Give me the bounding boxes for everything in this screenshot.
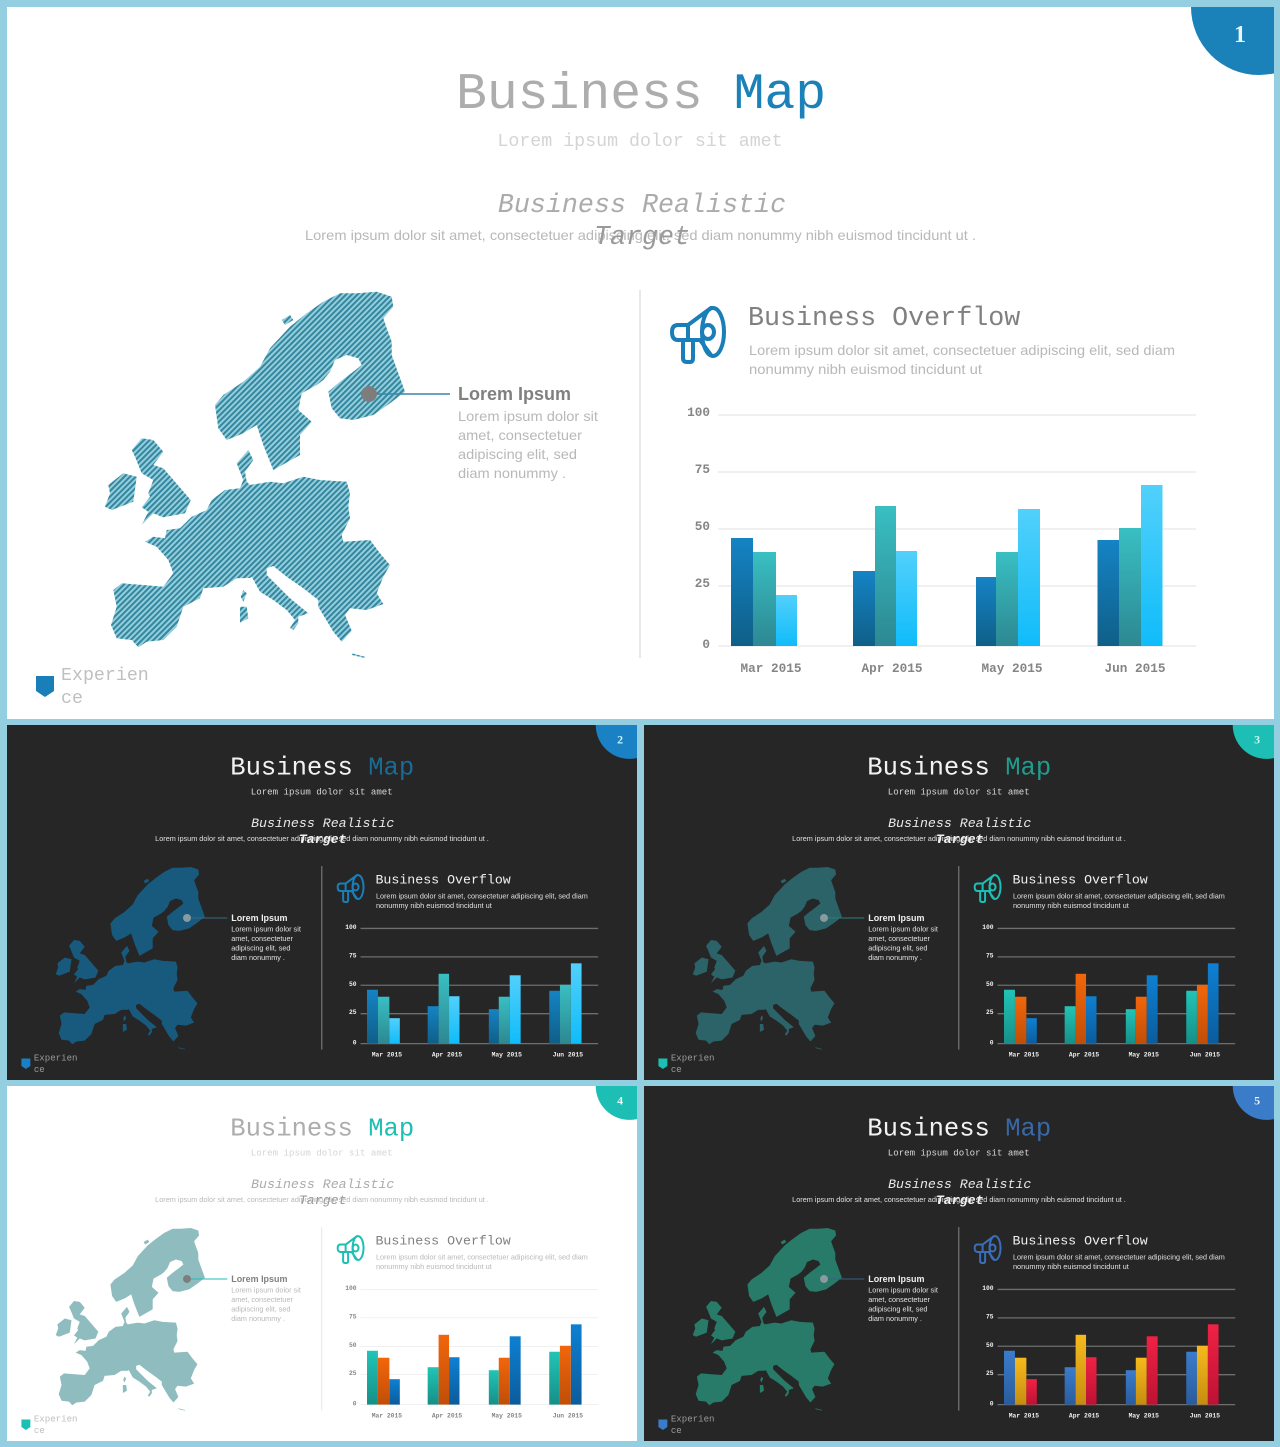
bar chart: 75	[695, 462, 710, 477]
section heading overflow word: Target	[936, 832, 984, 847]
callout text: Lorem ipsum dolor sit	[868, 926, 938, 933]
panel heading: Business Overflow	[1012, 1234, 1148, 1249]
icon: megaphone	[672, 308, 724, 362]
callout text: diam nonummy .	[231, 1316, 285, 1323]
section heading overflow word: Target	[299, 832, 347, 847]
bar chart: 0	[353, 1040, 357, 1047]
bar chart: May 2015	[1129, 1413, 1159, 1420]
footer logo: Experien	[34, 1053, 78, 1064]
section heading overflow word: Target	[299, 1193, 347, 1208]
callout text: diam nonummy .	[868, 955, 922, 962]
callout text: Lorem ipsum dolor sit	[231, 926, 301, 933]
bar chart: 50	[986, 1342, 994, 1349]
callout line	[369, 393, 450, 395]
intro text: Lorem ipsum dolor sit amet, consectetuer adipiscing elit, sed diam nonummy nibh euismod tincidunt ut .	[792, 1197, 1126, 1204]
intro text: Lorem ipsum dolor sit amet, consectetuer adipiscing elit, sed diam nonummy nibh euismod tincidunt ut .	[305, 227, 976, 243]
callout text: amet, consectetuer	[868, 1297, 931, 1304]
bar chart: 50	[349, 1342, 357, 1349]
bar chart: Apr 2015	[1069, 1413, 1099, 1420]
bar chart: May 2015	[492, 1052, 522, 1059]
footer logo: Experien	[671, 1053, 715, 1064]
section heading overflow word: Target	[594, 223, 690, 253]
bar chart: 50	[986, 981, 994, 988]
panel heading: Business Overflow	[1012, 873, 1148, 888]
footer logo: Experien	[34, 1414, 78, 1425]
bar chart	[687, 405, 1196, 676]
bar chart: 75	[349, 952, 357, 959]
bar chart: Mar 2015	[1009, 1413, 1039, 1420]
panel text: nonummy nibh euismod tincidunt ut	[376, 1264, 492, 1271]
bar chart: 25	[349, 1370, 357, 1377]
callout text: amet, consectetuer	[231, 936, 294, 943]
bar chart: 75	[349, 1313, 357, 1320]
panel heading: Business Overflow	[748, 304, 1020, 334]
footer logo: ce	[671, 1064, 682, 1075]
slide 2: dark blue	[7, 725, 637, 1080]
bar chart: 100	[687, 405, 710, 420]
bar chart: Jun 2015	[1190, 1413, 1220, 1420]
callout text: Lorem Ipsum	[868, 1274, 924, 1284]
panel text	[376, 1255, 588, 1271]
panel text: Lorem ipsum dolor sit amet, consectetuer adipiscing elit, sed diam	[376, 894, 588, 901]
bar chart	[345, 1285, 598, 1420]
callout text: Lorem ipsum dolor sit	[868, 1287, 938, 1294]
bar chart: Jun 2015	[1105, 661, 1165, 676]
footer logo	[21, 1053, 78, 1075]
icon: megaphone	[338, 875, 364, 902]
bar chart: May 2015	[982, 661, 1042, 676]
slide 3: dark teal	[644, 725, 1274, 1080]
page number badge	[1233, 1052, 1280, 1120]
callout dot	[183, 1275, 191, 1283]
footer logo: Experien	[671, 1414, 715, 1425]
panel text: nonummy nibh euismod tincidunt ut	[1013, 1264, 1129, 1271]
callout dot	[183, 914, 191, 922]
bar chart: 50	[349, 981, 357, 988]
callout text: Lorem Ipsum	[231, 913, 287, 923]
callout text: Lorem ipsum dolor sit	[231, 1287, 301, 1294]
bar chart: Mar 2015	[741, 661, 801, 676]
panel text: nonummy nibh euismod tincidunt ut	[1013, 903, 1129, 910]
bar chart: 25	[986, 1370, 994, 1377]
bar chart: May 2015	[492, 1413, 522, 1420]
callout text	[868, 1274, 938, 1323]
footer logo	[21, 1414, 78, 1436]
page number badge	[1233, 691, 1280, 759]
panel text	[1013, 894, 1225, 910]
page number badge: 4	[617, 1093, 623, 1107]
subtitle: Lorem ipsum dolor sit amet	[888, 1147, 1030, 1158]
callout text: amet, consectetuer	[458, 427, 582, 443]
footer logo: ce	[34, 1064, 45, 1075]
callout text	[231, 913, 301, 962]
panel text: Lorem ipsum dolor sit amet, consectetuer adipiscing elit, sed diam	[376, 1255, 588, 1262]
page number badge: 3	[1254, 732, 1260, 746]
section heading: Business Realistic	[888, 816, 1031, 831]
callout text	[231, 1274, 301, 1323]
map of Europe	[56, 1228, 205, 1411]
slide 5: dark blue green	[644, 1086, 1274, 1441]
bar chart: Apr 2015	[432, 1052, 462, 1059]
icon: megaphone	[975, 1236, 1001, 1263]
bar chart: 75	[986, 1313, 994, 1320]
panel text	[749, 342, 1175, 377]
callout line	[187, 917, 227, 919]
bar chart: Apr 2015	[1069, 1052, 1099, 1059]
intro text: Lorem ipsum dolor sit amet, consectetuer adipiscing elit, sed diam nonummy nibh euismod tincidunt ut .	[155, 1197, 489, 1204]
callout text: Lorem Ipsum	[231, 1274, 287, 1284]
callout text: adipiscing elit, sed	[868, 1306, 928, 1313]
page number badge: 5	[1254, 1093, 1260, 1107]
bar chart: 0	[353, 1401, 357, 1408]
subtitle: Lorem ipsum dolor sit amet	[888, 786, 1030, 797]
map of Europe	[56, 867, 205, 1050]
bar chart: Apr 2015	[432, 1413, 462, 1420]
subtitle: Lorem ipsum dolor sit amet	[251, 786, 393, 797]
intro text: Lorem ipsum dolor sit amet, consectetuer adipiscing elit, sed diam nonummy nibh euismod tincidunt ut .	[155, 836, 489, 843]
bar chart	[982, 1285, 1235, 1420]
intro text: Lorem ipsum dolor sit amet, consectetuer adipiscing elit, sed diam nonummy nibh euismod tincidunt ut .	[792, 836, 1126, 843]
slide 1: white hatched blue	[7, 7, 1274, 719]
bar chart	[982, 924, 1235, 1059]
footer logo: Experien	[61, 666, 149, 686]
callout text: adipiscing elit, sed	[231, 1306, 291, 1313]
callout text	[458, 384, 598, 481]
callout line	[187, 1278, 227, 1280]
callout text: adipiscing elit, sed	[868, 945, 928, 952]
bar chart: Mar 2015	[1009, 1052, 1039, 1059]
map of Europe	[105, 292, 405, 658]
callout text: diam nonummy .	[458, 465, 566, 481]
bar chart: 0	[702, 637, 710, 652]
bar chart: 75	[986, 952, 994, 959]
title: Business Map	[867, 753, 1051, 782]
subtitle: Lorem ipsum dolor sit amet	[251, 1147, 393, 1158]
page number badge: 1	[1234, 22, 1246, 48]
section heading: Business Realistic	[888, 1177, 1031, 1192]
footer logo: ce	[34, 1425, 45, 1436]
footer logo	[36, 666, 149, 709]
bar chart: Mar 2015	[372, 1052, 402, 1059]
panel text: nonummy nibh euismod tincidunt ut	[376, 903, 492, 910]
footer logo: ce	[61, 689, 83, 709]
footer logo	[658, 1414, 715, 1436]
bar chart: 100	[982, 924, 994, 931]
panel heading: Business Overflow	[375, 1234, 511, 1249]
bar chart: Mar 2015	[372, 1413, 402, 1420]
map of Europe	[693, 1228, 842, 1411]
bar chart: Jun 2015	[553, 1052, 583, 1059]
callout text: Lorem Ipsum	[458, 384, 571, 404]
slide 4: white teal	[7, 1086, 637, 1441]
bar chart: Jun 2015	[1190, 1052, 1220, 1059]
callout text: Lorem ipsum dolor sit	[458, 408, 598, 424]
callout text: amet, consectetuer	[868, 936, 931, 943]
title: Business Map	[867, 1114, 1051, 1143]
bar chart: 100	[982, 1285, 994, 1292]
section heading overflow word: Target	[936, 1193, 984, 1208]
section heading: Business Realistic	[251, 1177, 394, 1192]
callout line	[824, 917, 864, 919]
page number badge: 2	[617, 732, 623, 746]
icon: megaphone	[975, 875, 1001, 902]
bar chart: 100	[345, 1285, 357, 1292]
callout dot	[820, 914, 828, 922]
bar chart: Jun 2015	[553, 1413, 583, 1420]
bar chart: 50	[695, 519, 710, 534]
bar chart: Apr 2015	[862, 661, 922, 676]
bar chart: May 2015	[1129, 1052, 1159, 1059]
title: Business Map	[230, 1114, 414, 1143]
panel text: nonummy nibh euismod tincidunt ut	[749, 361, 982, 377]
bar chart: 25	[986, 1009, 994, 1016]
panel text: Lorem ipsum dolor sit amet, consectetuer adipiscing elit, sed diam	[1013, 1255, 1225, 1262]
bar chart: 0	[990, 1401, 994, 1408]
panel heading: Business Overflow	[375, 873, 511, 888]
callout text	[868, 913, 938, 962]
bar chart: 25	[349, 1009, 357, 1016]
footer logo: ce	[671, 1425, 682, 1436]
title: Business Map	[456, 66, 826, 124]
subtitle: Lorem ipsum dolor sit amet	[497, 132, 783, 152]
callout text: diam nonummy .	[231, 955, 285, 962]
icon: megaphone	[338, 1236, 364, 1263]
callout text: adipiscing elit, sed	[458, 446, 577, 462]
callout line	[824, 1278, 864, 1280]
page number badge	[1191, 0, 1280, 75]
callout text: amet, consectetuer	[231, 1297, 294, 1304]
panel text	[1013, 1255, 1225, 1271]
section heading: Business Realistic	[251, 816, 394, 831]
callout text: diam nonummy .	[868, 1316, 922, 1323]
map of Europe	[693, 867, 842, 1050]
bar chart	[345, 924, 598, 1059]
bar chart: 100	[345, 924, 357, 931]
bar chart: 0	[990, 1040, 994, 1047]
title: Business Map	[230, 753, 414, 782]
callout dot	[361, 386, 377, 402]
callout text: adipiscing elit, sed	[231, 945, 291, 952]
callout dot	[820, 1275, 828, 1283]
footer logo	[658, 1053, 715, 1075]
panel text: Lorem ipsum dolor sit amet, consectetuer adipiscing elit, sed diam	[1013, 894, 1225, 901]
panel text: Lorem ipsum dolor sit amet, consectetuer adipiscing elit, sed diam	[749, 342, 1175, 358]
page number badge	[596, 1052, 663, 1120]
callout text: Lorem Ipsum	[868, 913, 924, 923]
page number badge	[596, 691, 663, 759]
panel text	[376, 894, 588, 910]
bar chart: 25	[695, 576, 710, 591]
section heading: Business Realistic	[498, 191, 786, 221]
